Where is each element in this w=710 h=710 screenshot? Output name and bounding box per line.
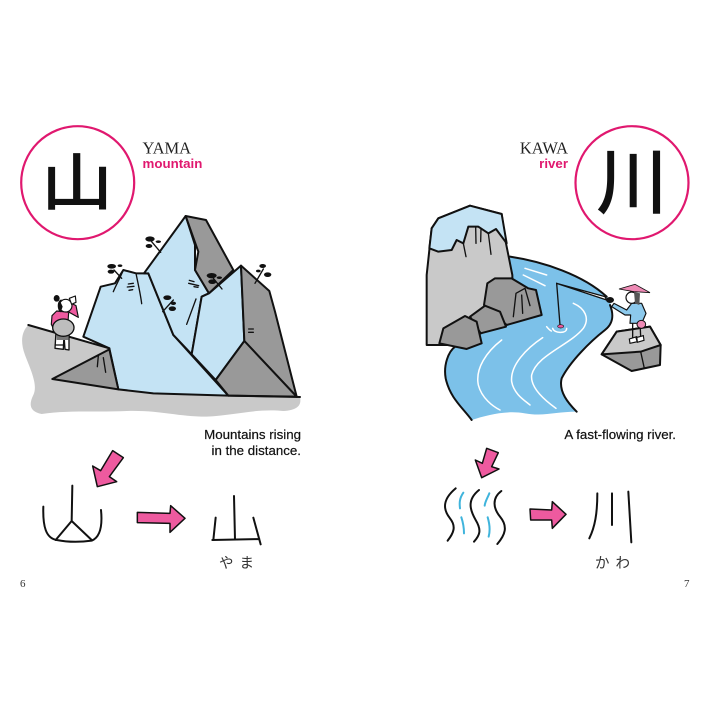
rock detail strokes <box>97 270 196 372</box>
pictograph: mountain drawing <box>43 486 101 542</box>
rocks <box>484 278 542 325</box>
arrow: right <box>137 506 185 532</box>
water ripples <box>478 268 586 410</box>
kanji circle: mountain: 山 <box>41 149 113 219</box>
right blue mountain <box>192 266 244 380</box>
hiragana: kawa: かわ <box>595 555 636 572</box>
kanji circle: mountain <box>21 126 134 239</box>
left blue mountain <box>83 270 228 396</box>
cliff snow <box>429 206 507 252</box>
heading: YAMA mountain: mountain <box>142 156 202 171</box>
caption: mountains <box>204 427 301 458</box>
river <box>445 257 613 420</box>
arrow: down left <box>93 451 123 487</box>
right grey face <box>241 266 297 397</box>
cliff <box>427 206 513 345</box>
illustration: river <box>427 206 661 420</box>
heading: YAMA mountain: YAMA <box>142 138 191 158</box>
arrow: down left <box>475 448 499 478</box>
figure: fisher <box>606 284 650 343</box>
ledge shadow <box>52 349 118 389</box>
caption: mountains: Mountains rising <box>204 427 301 442</box>
panel: mountain page <box>20 126 301 590</box>
stone <box>602 327 661 371</box>
panel: river page <box>427 126 690 590</box>
heading: KAWA river <box>520 138 568 171</box>
figure: hiker <box>51 295 78 350</box>
kanji strokes: river <box>589 492 631 542</box>
page number 7: 7 <box>684 578 690 590</box>
ground lines <box>28 325 300 397</box>
page number 6: 6 <box>20 578 26 590</box>
heading: KAWA river: river <box>539 156 568 171</box>
kanji circle: river <box>576 126 688 239</box>
kanji strokes: mountain <box>212 496 261 544</box>
illustration: mountains <box>22 216 300 417</box>
caption: river: A fast-flowing river. <box>564 427 676 442</box>
kanji circle: river: 川 <box>596 144 668 224</box>
trees <box>107 236 271 312</box>
cliff strokes <box>463 227 491 257</box>
fishing rod and float <box>557 283 607 328</box>
hiragana: yama: やま <box>219 555 260 572</box>
pictograph steps: river <box>445 448 631 544</box>
caption: mountains: in the distance. <box>212 443 301 458</box>
pictograph steps: mountain <box>43 451 261 544</box>
lower grey face <box>216 341 297 397</box>
centre grey face <box>186 216 233 293</box>
heading: KAWA river: KAWA <box>520 138 568 158</box>
centre blue mountain <box>144 216 209 354</box>
pictograph: river drawing <box>445 488 505 544</box>
river banks <box>445 257 612 420</box>
ground <box>22 325 300 417</box>
heading: YAMA mountain <box>142 138 202 171</box>
arrow: right <box>530 502 566 528</box>
